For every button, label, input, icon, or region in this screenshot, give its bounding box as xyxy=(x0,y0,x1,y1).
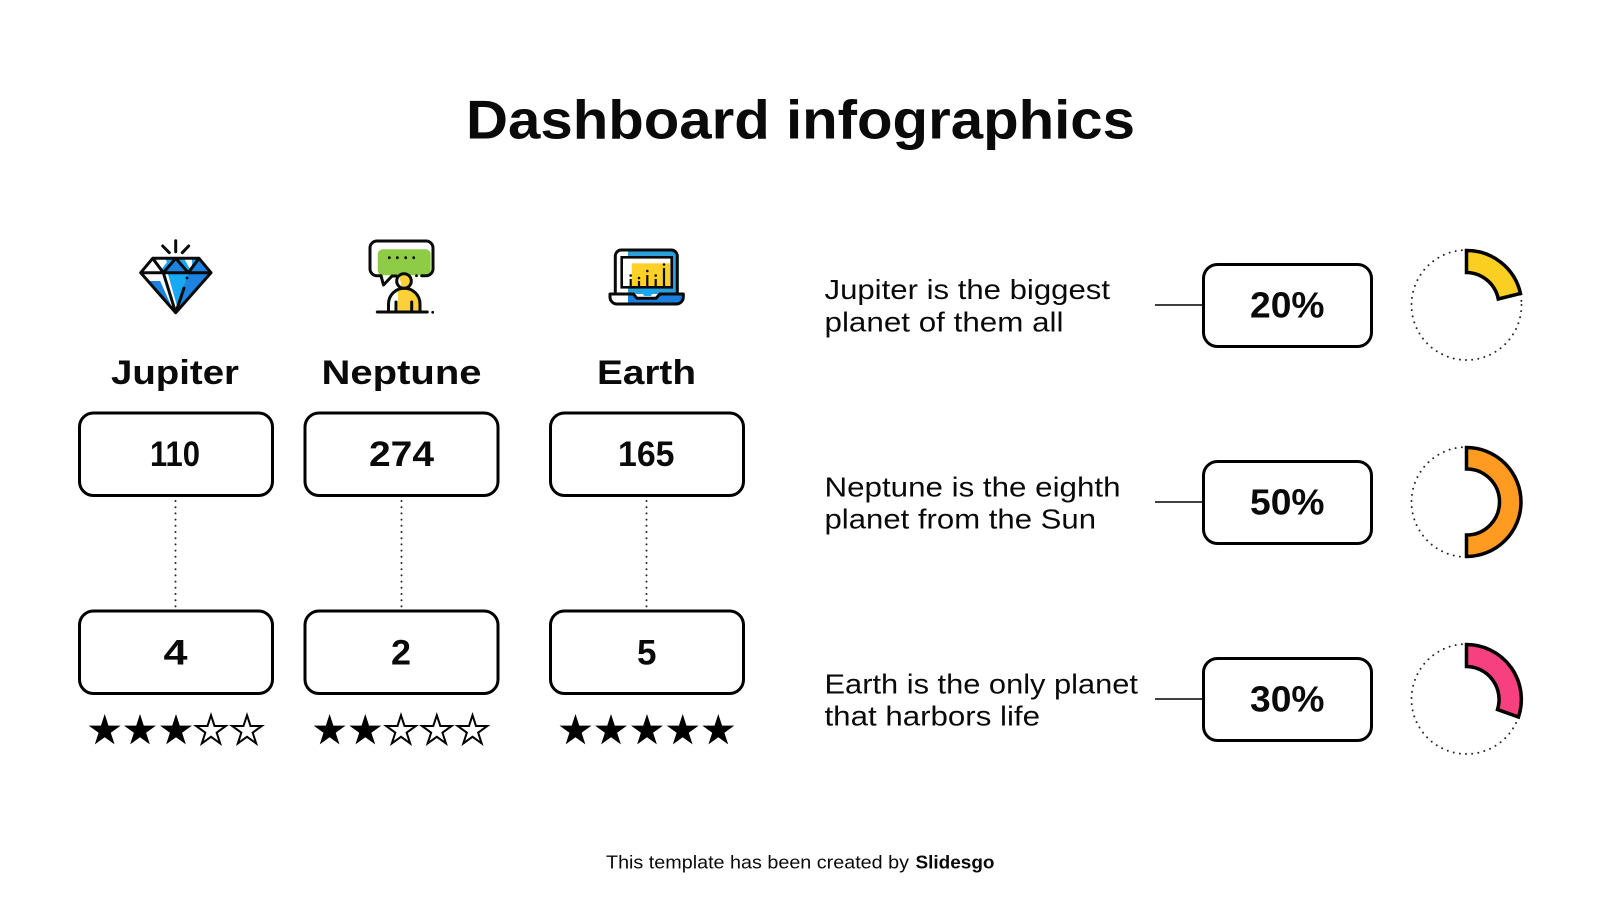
text: Earth description line 2: that harbors life xyxy=(824,700,1040,731)
text: Neptune description: Neptune is the eighth xyxy=(824,472,1120,503)
panel: Neptune column xyxy=(305,241,498,744)
panel: Neptune 50% row xyxy=(824,447,1522,557)
value box: 165 xyxy=(550,413,744,496)
value box: 110: 110 xyxy=(150,435,200,474)
text: Neptune description line 2: planet from the Sun xyxy=(824,504,1096,534)
heading: Jupiter: Jupiter xyxy=(111,354,239,392)
value box: 50%: 50% xyxy=(1250,482,1324,522)
star rating: 2 of 5 xyxy=(314,714,487,744)
star rating: 3 of 5 xyxy=(89,714,262,744)
rating box: 4 xyxy=(80,611,272,694)
value box: 30% xyxy=(1204,658,1372,740)
heading: Earth: Earth xyxy=(597,354,696,392)
rating box: 5: 5 xyxy=(637,634,656,672)
value box: 50% xyxy=(1204,462,1372,544)
value box: 274 xyxy=(305,413,498,496)
icon: laptop with chart xyxy=(610,250,683,304)
icon: speech bubble and person xyxy=(370,241,434,314)
footer credit: Slidesgo xyxy=(916,852,995,872)
donut chart: 50% xyxy=(1412,447,1522,557)
value box: 274: 274 xyxy=(369,435,435,474)
panel: Jupiter column xyxy=(80,241,272,744)
text: Jupiter description: Jupiter is the biggest xyxy=(824,274,1110,305)
title: Dashboard infographics xyxy=(466,88,1135,150)
rating box: 2 xyxy=(305,611,498,694)
value box: 20%: 20% xyxy=(1250,284,1324,326)
heading: Neptune: Neptune xyxy=(322,354,482,392)
rating box: 4: 4 xyxy=(164,634,188,672)
text: Earth description: Earth is the only planet xyxy=(824,669,1138,700)
donut chart: 20% xyxy=(1412,250,1522,360)
icon: diamond xyxy=(141,241,211,313)
value box: 165: 165 xyxy=(618,435,674,474)
panel: Jupiter 20% row xyxy=(824,250,1522,360)
star rating: 5 of 5 xyxy=(560,714,734,744)
text: Jupiter description line 2: planet of them all xyxy=(824,307,1064,338)
footer credit: This template has been created by xyxy=(606,852,909,872)
value box: 30%: 30% xyxy=(1250,678,1324,720)
value box: 20% xyxy=(1204,264,1372,346)
donut chart: 30% xyxy=(1412,644,1522,754)
rating box: 5 xyxy=(550,611,744,694)
rating box: 2: 2 xyxy=(391,634,411,672)
panel: Earth 30% row xyxy=(824,644,1522,754)
value box: 110 xyxy=(80,413,272,496)
panel: Earth column xyxy=(550,250,744,744)
